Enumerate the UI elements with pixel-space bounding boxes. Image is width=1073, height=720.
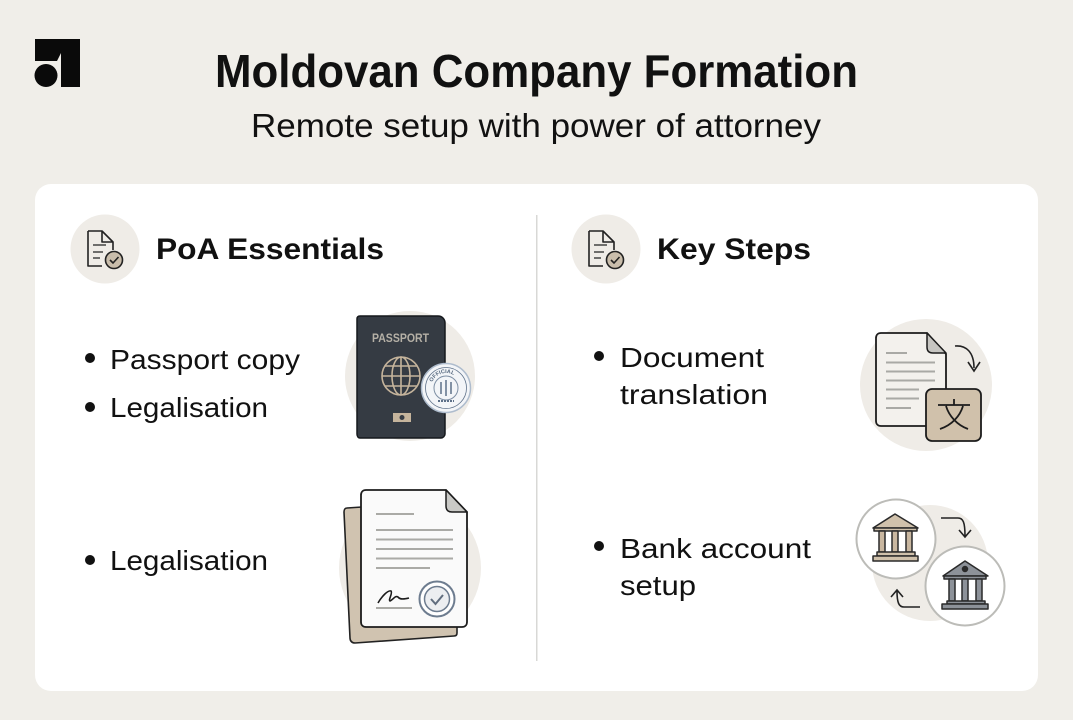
icon: document check: [572, 214, 640, 284]
bullet: Document translation: [594, 342, 768, 410]
bullet: Legalisation: Legalisation: [110, 392, 268, 423]
icon: document translation: [860, 319, 992, 451]
icon: document check: [70, 214, 140, 284]
bullet: Bank account setup: [594, 533, 811, 601]
bullet: Bank account setup: Bank account: [620, 533, 811, 564]
panel: Key Steps: [572, 214, 1004, 626]
bullet: Bank account setup: setup: [620, 570, 696, 601]
subtitle: Remote setup with power of attorney: [251, 107, 822, 144]
divider: [536, 215, 538, 661]
logo: [34, 39, 80, 87]
title: Moldovan Company Formation: [215, 45, 858, 97]
icon: passport with stamp: PASSPORT: [372, 333, 429, 345]
panel: PoA Essentials: [70, 214, 481, 644]
panel: main card: [35, 184, 1038, 691]
bullet: Legalisation second: Legalisation: [110, 545, 268, 576]
icon: signed document: [339, 490, 481, 643]
icon: bank transfer: [856, 500, 1004, 626]
bullet: Document translation: translation: [620, 379, 768, 410]
bullet: Passport copy: Passport copy: [110, 344, 300, 375]
heading: Key Steps: Key Steps: [657, 233, 811, 266]
icon: passport with stamp: [345, 311, 475, 441]
bullet: Document translation: Document: [620, 342, 764, 373]
heading: PoA Essentials: PoA Essentials: [156, 233, 384, 266]
icon: passport with stamp: OFFICIAL: [430, 369, 454, 382]
